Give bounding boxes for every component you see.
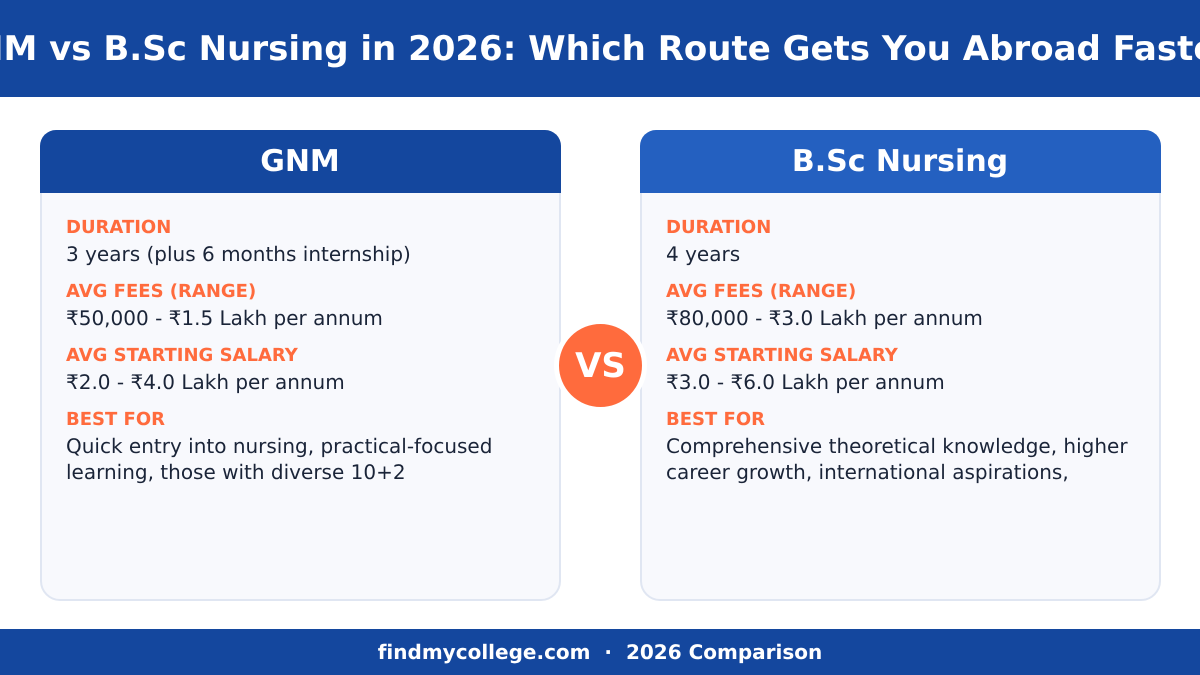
- label: duration: DURATION: [66, 217, 171, 238]
- VS badge: VS: [575, 346, 626, 386]
- label: duration: DURATION: [666, 217, 771, 238]
- value: best for: [66, 434, 492, 484]
- value: duration: 3 years (plus 6 months internship): [66, 242, 411, 266]
- value: best for: career growth, international aspirations,: [666, 460, 1069, 484]
- panel heading: B.Sc Nursing: [640, 130, 1161, 193]
- label: best for: BEST FOR: [666, 409, 765, 430]
- value: fees: ₹50,000 - ₹1.5 Lakh per annum: [66, 306, 383, 330]
- value: best for: [666, 434, 1128, 484]
- panel heading: GNM: GNM: [260, 144, 340, 179]
- value: best for: Comprehensive theoretical knowledge, higher: [666, 434, 1128, 458]
- value: best for: Quick entry into nursing, practical-focused: [66, 434, 492, 458]
- label: fees: AVG FEES (RANGE): [666, 281, 856, 302]
- label: salary: AVG STARTING SALARY: [66, 345, 298, 366]
- panel heading: GNM: [40, 130, 561, 193]
- title banner: [0, 0, 1200, 97]
- panel heading: B.Sc Nursing: B.Sc Nursing: [792, 144, 1008, 179]
- value: duration: 4 years: [666, 242, 740, 266]
- value: salary: ₹3.0 - ₹6.0 Lakh per annum: [666, 370, 945, 394]
- panel: B.Sc Nursing: [640, 130, 1161, 601]
- VS badge: [554, 319, 647, 412]
- panel: GNM: [40, 130, 561, 601]
- footer: [0, 629, 1200, 675]
- footer: findmycollege.com · 2026 Comparison: [378, 640, 822, 664]
- value: best for: learning, those with diverse 10+2: [66, 460, 406, 484]
- value: fees: ₹80,000 - ₹3.0 Lakh per annum: [666, 306, 983, 330]
- label: salary: AVG STARTING SALARY: [666, 345, 898, 366]
- label: fees: AVG FEES (RANGE): [66, 281, 256, 302]
- label: best for: BEST FOR: [66, 409, 165, 430]
- value: salary: ₹2.0 - ₹4.0 Lakh per annum: [66, 370, 345, 394]
